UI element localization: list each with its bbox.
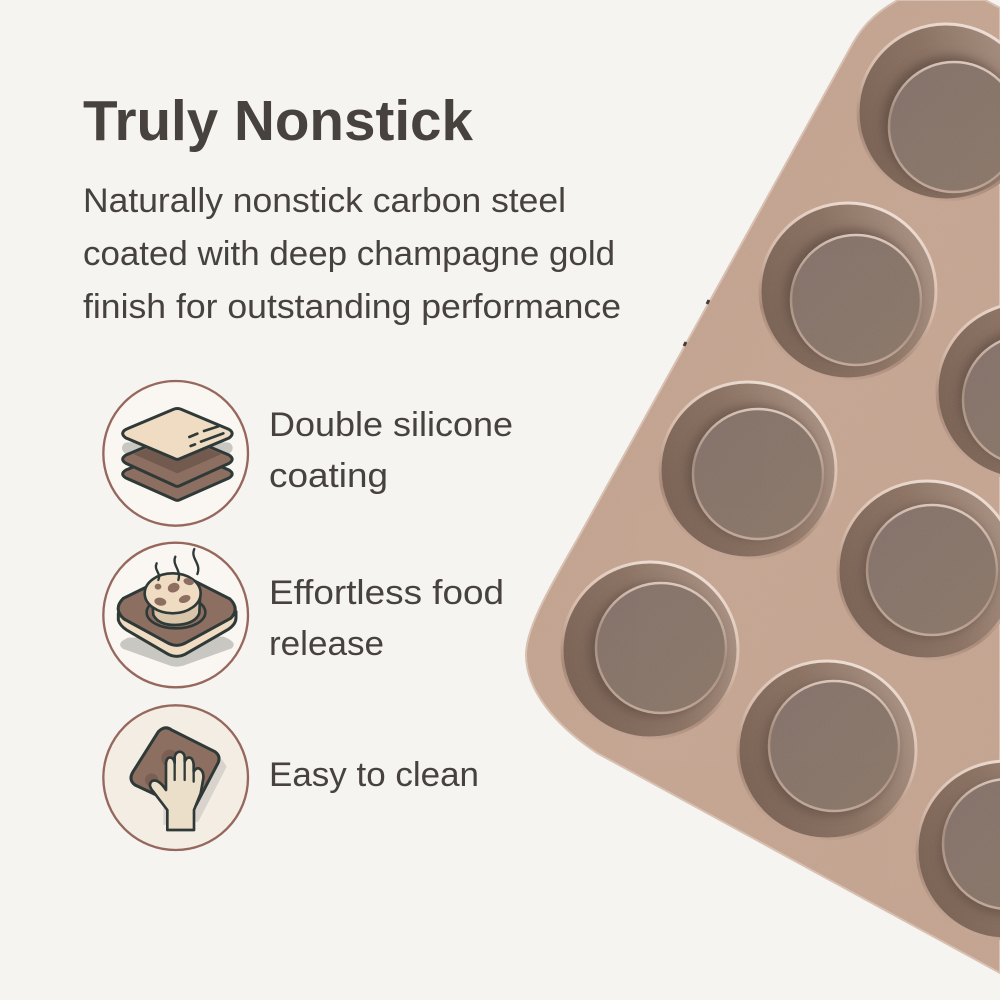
feature label: double silicone coating: coating [269, 457, 388, 495]
icon: food release [103, 543, 248, 687]
feature label: effortless food release [269, 574, 504, 663]
feature label: double silicone coating: Double silicone [269, 406, 513, 444]
photo: muffin pan [520, 0, 1000, 1000]
title: Truly Nonstick [83, 89, 473, 153]
pan body [526, 0, 1000, 973]
icon: layered coating [103, 381, 248, 526]
description text: coated with deep champagne gold [83, 235, 615, 273]
description text: Naturally nonstick carbon steel [83, 182, 566, 220]
feature label: effortless food release: release [269, 625, 384, 663]
feature label: double silicone coating [269, 406, 513, 495]
feature label: effortless food release: Effortless food [269, 574, 504, 612]
muffin cups [562, 24, 1000, 939]
feature label: easy to clean: Easy to clean [269, 756, 479, 794]
description text [83, 182, 621, 326]
icon: easy clean hand with cloth [103, 705, 248, 850]
description text: finish for outstanding performance [83, 288, 621, 326]
